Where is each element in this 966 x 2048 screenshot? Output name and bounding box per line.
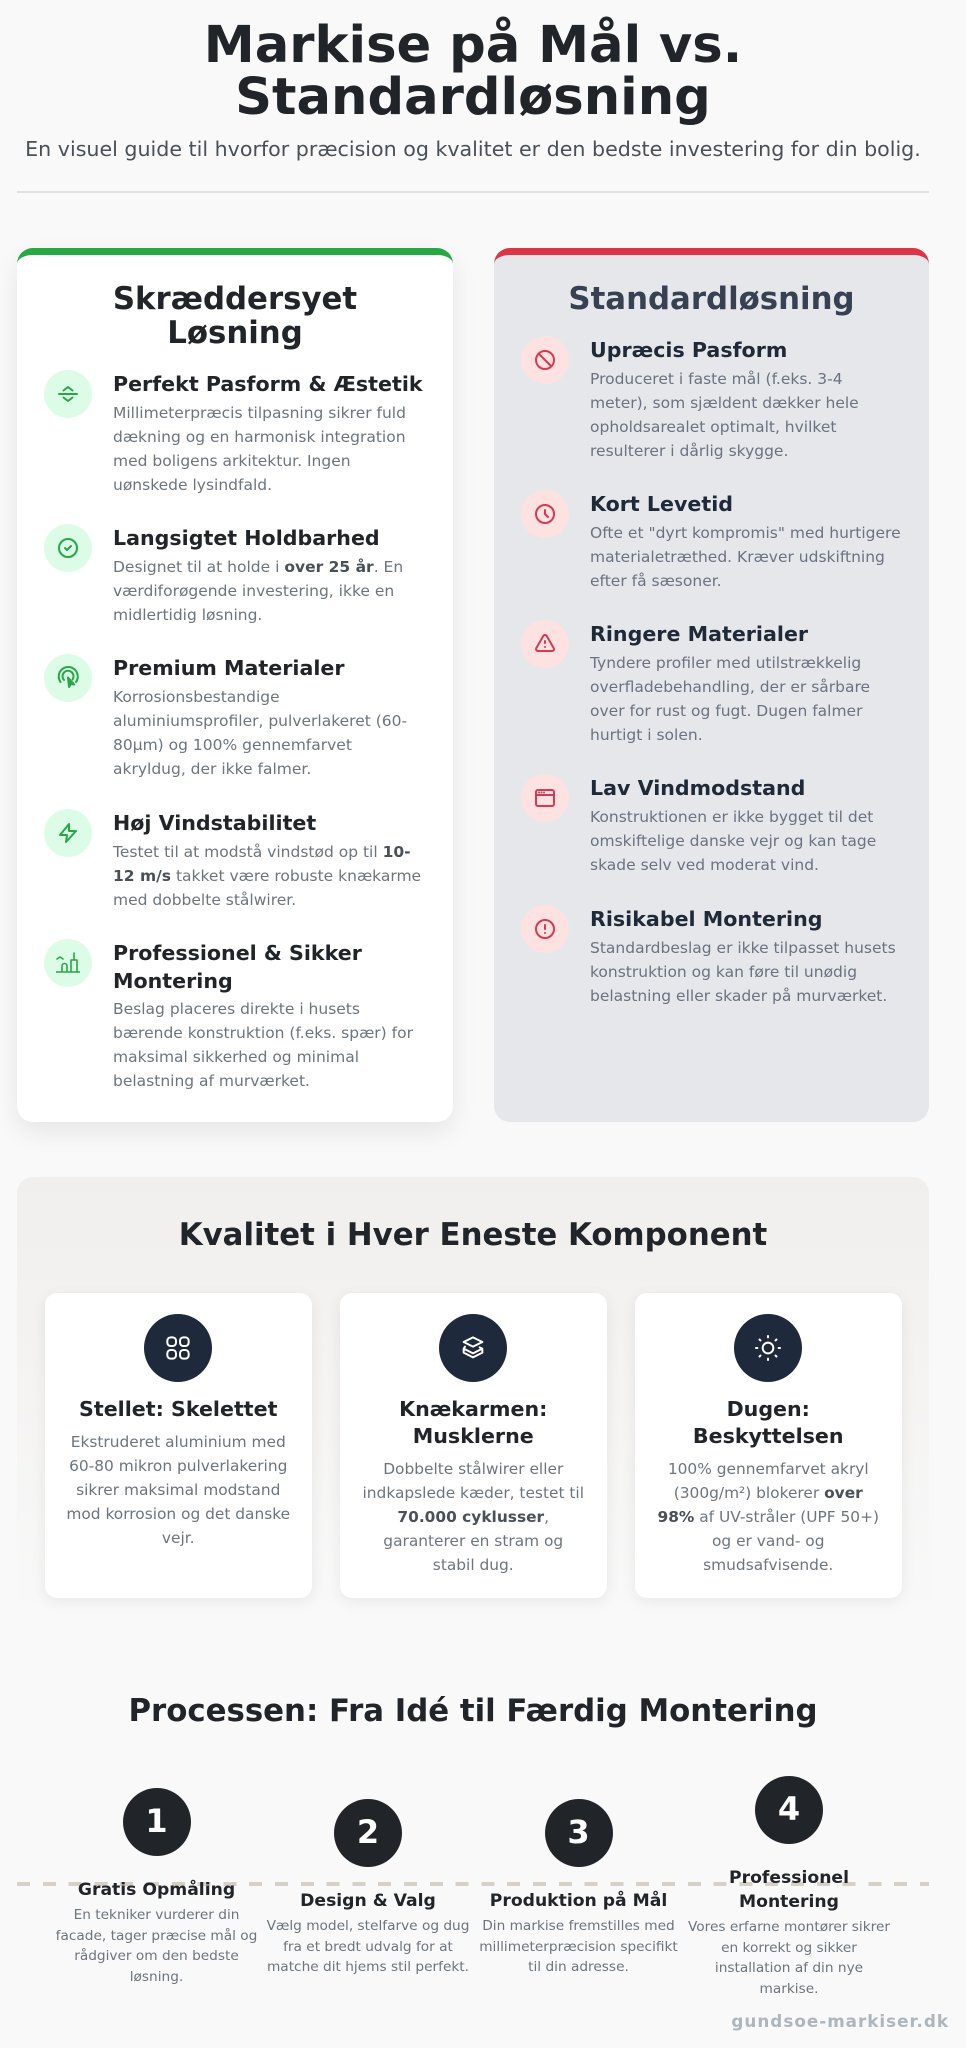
icon: ban [521,336,569,384]
text: upræcis pasform: opholdsarealet optimalt, hvilket [590,418,836,436]
text: upræcis pasform: resulterer i dårlig skygge. [590,442,788,460]
step text 4: markise. [760,1980,818,1996]
text: ringere materialer: over for rust og fugt. Dugen falmer [590,702,862,720]
icon: fit [44,370,92,418]
text: langsigtet holdbarhed: midlertidig løsning. [113,606,262,624]
text: kort levetid: efter få sæsoner. [590,572,722,590]
card text: stellet: sikrer maksimal modstand [76,1481,280,1499]
card text: stellet: 60-80 mikron pulverlakering [69,1457,287,1475]
card text: dugen: og er vand- og [712,1532,824,1550]
text: upræcis pasform: meter), som sjældent dækker hele [590,394,859,412]
text: høj vindstabilitet: Høj Vindstabilitet [113,811,316,835]
text: risikabel montering [590,907,896,1004]
item: premium materialer [44,654,407,778]
text: perfekt pasform: Perfekt Pasform & Æstetik [113,372,423,396]
step text 2: fra et bredt udvalg for at [283,1938,453,1954]
card text: stellet: vejr. [162,1529,195,1547]
card text: knækarmen: Dobbelte stålwirer eller [383,1460,563,1478]
card title: knækarmen: Knækarmen: [399,1397,547,1421]
text: lav vindmodstand [590,776,876,874]
icon: clock [521,490,569,538]
step number 1: 1 [145,1802,168,1840]
step number 1 [122,1788,190,1856]
text: premium materialer: 80µm) og 100% gennemfarvet [113,736,352,754]
text: premium materialer: aluminiumsprofiler, pulverlakeret (60- [113,712,407,730]
text: perfekt pasform: dækning og en harmonisk integration [113,428,406,446]
icon: lightning [44,809,92,857]
card text: dugen: smudsafvisende. [703,1556,833,1574]
heading: kvalitet: Kvalitet i Hver Eneste Komponent [179,1217,767,1253]
text: ringere materialer: Ringere Materialer [590,622,808,646]
step title 4 [729,1868,849,1912]
step text 4: en korrekt og sikker [721,1940,857,1956]
text: kort levetid [590,492,901,590]
step title 4: Montering [739,1892,839,1912]
text: premium materialer: akryldug, der ikke falmer. [113,760,311,778]
icon: warning [521,620,569,668]
item: høj vindstabilitet [44,809,421,908]
text: professionel montering [113,941,413,1090]
card: dugen [634,1293,902,1598]
step text 2: matche dit hjems stil perfekt. [267,1959,469,1975]
text: perfekt pasform: uønskede lysindfald. [113,476,272,494]
card text: knækarmen: indkapslede kæder, testet til [363,1484,584,1502]
subtitle: En visuel guide til hvorfor præcision og kvalitet er den bedste investering for din bolig. [25,137,921,161]
card text: knækarmen: 70.000 cyklusser, [397,1508,549,1526]
text: lav vindmodstand: Konstruktionen er ikke bygget til det [590,808,873,826]
text: kort levetid: Kort Levetid [590,492,733,516]
text: ringere materialer: overfladebehandling, der er sårbare [590,678,870,696]
icon: mounting [44,939,92,987]
icon: check circle [44,524,92,572]
footer: source: gundsoe-markiser.dk [731,2011,949,2031]
step title 2: Design & Valg [300,1891,436,1911]
text: premium materialer: Premium Materialer [113,656,345,680]
card text: knækarmen [363,1460,584,1574]
card title: dugen: Dugen: [727,1397,810,1421]
text: professionel montering: belastning af murværket. [113,1072,310,1090]
card title: stellet: Stellet: Skelettet [79,1397,277,1421]
card text: dugen: 100% gennemfarvet akryl [668,1460,869,1478]
item: langsigtet holdbarhed [44,524,403,624]
step text 1: rådgiver om den bedste [74,1948,239,1964]
step number 2 [334,1799,402,1867]
step text 3: til din adresse. [528,1959,629,1975]
icon: grid [144,1314,212,1382]
text: risikabel montering: konstruktion og kan føre til unødig [590,962,857,980]
step text 4 [688,1919,890,1996]
item: kort levetid [521,490,901,590]
card text: knækarmen: stabil dug. [433,1556,514,1574]
text: lav vindmodstand: omskiftelige danske vejr og kan tage [590,832,876,850]
step text 1 [56,1907,257,1984]
text: professionel montering: Professionel & Sikker [113,941,362,965]
step title 3: Produktion på Mål [490,1891,667,1911]
card title: dugen: Beskyttelsen [693,1424,844,1448]
heading: skræddersyet løsning [113,281,357,351]
text: høj vindstabilitet: Testet til at modstå vindstød op til 10- [113,842,411,860]
text: langsigtet holdbarhed: værdiforøgende investering, ikke en [113,582,394,600]
text: høj vindstabilitet [112,811,421,908]
text: upræcis pasform: Upræcis Pasform [590,338,787,362]
text: ringere materialer: hurtigt i solen. [590,726,703,744]
step number 3: 3 [567,1813,590,1851]
step number 2: 2 [357,1813,379,1851]
text: premium materialer [113,656,407,778]
text: høj vindstabilitet: med dobbelte stålwirer. [113,890,296,908]
step title 1: Gratis Opmåling [78,1880,235,1900]
text: upræcis pasform: Produceret i faste mål (f.eks. 3-4 [590,370,843,388]
card: knækarmen [340,1293,607,1598]
step number 4 [755,1776,823,1844]
item: professionel montering [44,939,413,1090]
card text: knækarmen: garanterer en stram og [383,1532,563,1550]
step 4 [688,1776,890,1996]
text: kort levetid: Ofte et "dyrt kompromis" med hurtigere [590,524,901,542]
step text 1: En tekniker vurderer din [74,1907,239,1923]
step text 4: Vores erfarne montører sikrer [688,1919,890,1935]
step title 4: Professionel [729,1868,849,1888]
item: ringere materialer [521,620,870,744]
step text 2: Vælg model, stelfarve og dug [267,1918,469,1934]
panel: kvalitet i hver eneste komponent [17,1177,929,1622]
icon: sun [734,1314,802,1382]
text: upræcis pasform [590,338,859,460]
item: upræcis pasform [521,336,859,460]
step text 1: løsning. [130,1968,183,1984]
title [204,15,742,127]
card: stellet [44,1293,312,1598]
text: professionel montering: bærende konstruktion (f.eks. spær) for [113,1024,413,1042]
text: langsigtet holdbarhed: Designet til at holde i over 25 år. En [113,558,403,576]
text: kort levetid: materialetræthed. Kræver udskiftning [590,548,885,566]
text: ringere materialer: Tyndere profiler med utilstrækkelig [590,654,861,672]
text: risikabel montering: Risikabel Montering [590,907,822,931]
card text: dugen: 98% af UV-stråler (UPF 50+) [658,1508,879,1526]
card text: stellet: Ekstruderet aluminium med [71,1433,286,1451]
step text 3 [479,1918,678,1975]
step 3 [479,1799,678,1975]
step 1 [56,1788,257,1984]
step number 4: 4 [778,1790,800,1828]
text: perfekt pasform: med boligens arkitektur. Ingen [113,452,351,470]
panel: skræddersyet løsning [17,248,453,1122]
card text: stellet: mod korrosion og det danske [66,1505,290,1523]
step text 3: millimeterpræcision specifikt [479,1938,678,1954]
text: risikabel montering: Standardbeslag er ikke tilpasset husets [590,938,896,956]
heading: skræddersyet løsning: Løsning [167,315,303,351]
icon: cursor with arcs [44,654,92,702]
step text 3: Din markise fremstilles med [482,1918,675,1934]
icon: exclamation circle [521,905,569,953]
card text: stellet [66,1433,290,1547]
text: professionel montering: Montering [113,968,233,992]
item: lav vindmodstand [521,774,876,874]
item: perfekt pasform [44,370,423,494]
title: Standardløsning [235,67,711,127]
text: premium materialer: Korrosionsbestandige [113,688,280,706]
card title: knækarmen: Musklerne [413,1424,534,1448]
card title: dugen [693,1397,844,1448]
text: ringere materialer [590,622,870,744]
heading: skræddersyet løsning: Skræddersyet [113,281,357,317]
title: Markise på Mål vs. [204,15,742,75]
heading: standardløsning: Standardløsning [568,281,855,317]
icon: layers [439,1314,507,1382]
step text 1: facade, tager præcise mål og [56,1928,257,1944]
card text: dugen [658,1460,879,1574]
card title: knækarmen [399,1397,547,1448]
item: risikabel montering [521,905,896,1004]
text: professionel montering: maksimal sikkerhed og minimal [113,1048,359,1066]
text: langsigtet holdbarhed: Langsigtet Holdbarhed [113,526,380,550]
text: risikabel montering: belastning eller skader på murværket. [590,986,887,1004]
icon: window [521,774,569,822]
text: lav vindmodstand: Lav Vindmodstand [590,776,805,800]
text: lav vindmodstand: skade selv ved moderat vind. [590,856,819,874]
text: langsigtet holdbarhed [113,526,403,624]
step number 3 [544,1799,612,1867]
text: perfekt pasform [113,372,423,494]
panel: standardløsning [494,248,929,1122]
step text 4: installation af din nye [715,1960,863,1976]
heading: processen: Processen: Fra Idé til Færdig Montering [128,1693,818,1729]
text: professionel montering: Beslag placeres direkte i husets [113,1000,360,1018]
text: høj vindstabilitet: 12 m/s takket være robuste knækarme [113,866,421,884]
card text: dugen: (300g/m²) blokerer over [674,1484,863,1502]
step text 2 [266,1918,469,1975]
step 2 [266,1799,469,1975]
text: perfekt pasform: Millimeterpræcis tilpasning sikrer fuld [113,404,406,422]
